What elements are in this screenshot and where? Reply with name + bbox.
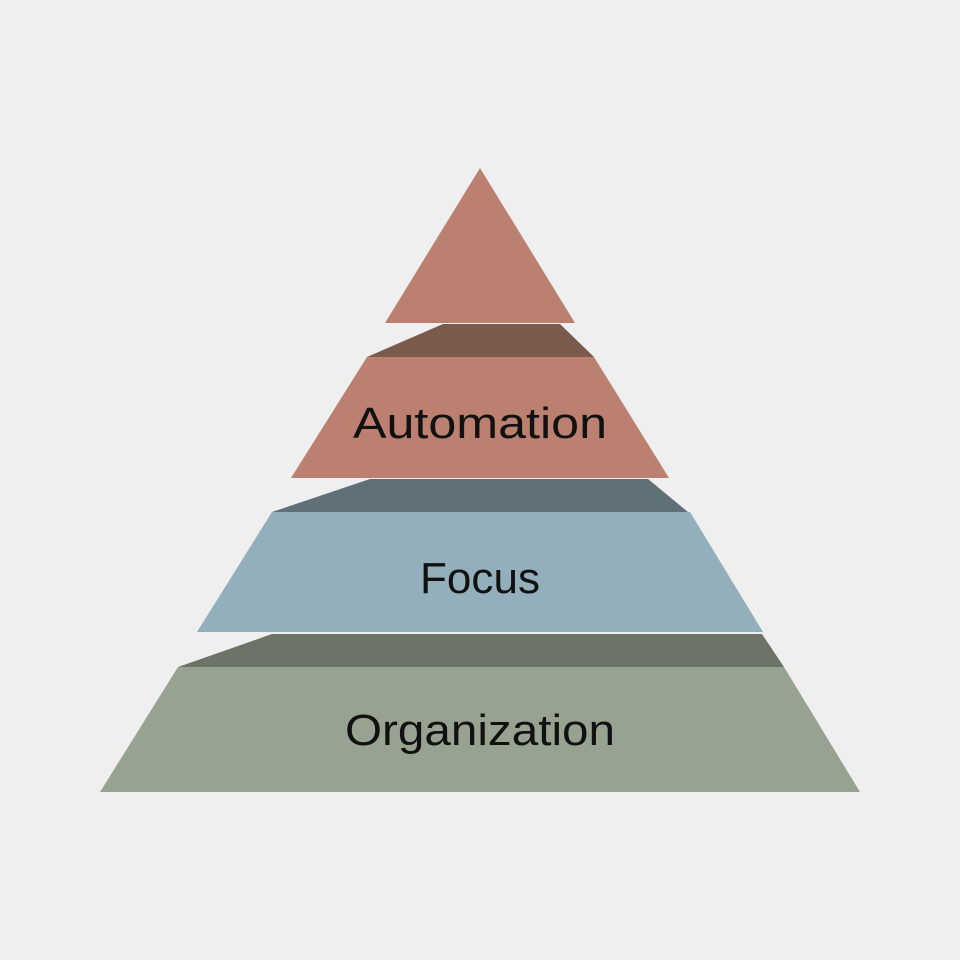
tier: focus [197,479,763,632]
tier: organization [100,634,860,792]
label: organization: Organization [345,706,615,755]
label: automation: Automation [353,399,607,448]
tier: apex [385,168,575,323]
tier: automation [291,324,669,478]
label: focus: Focus [420,554,540,603]
